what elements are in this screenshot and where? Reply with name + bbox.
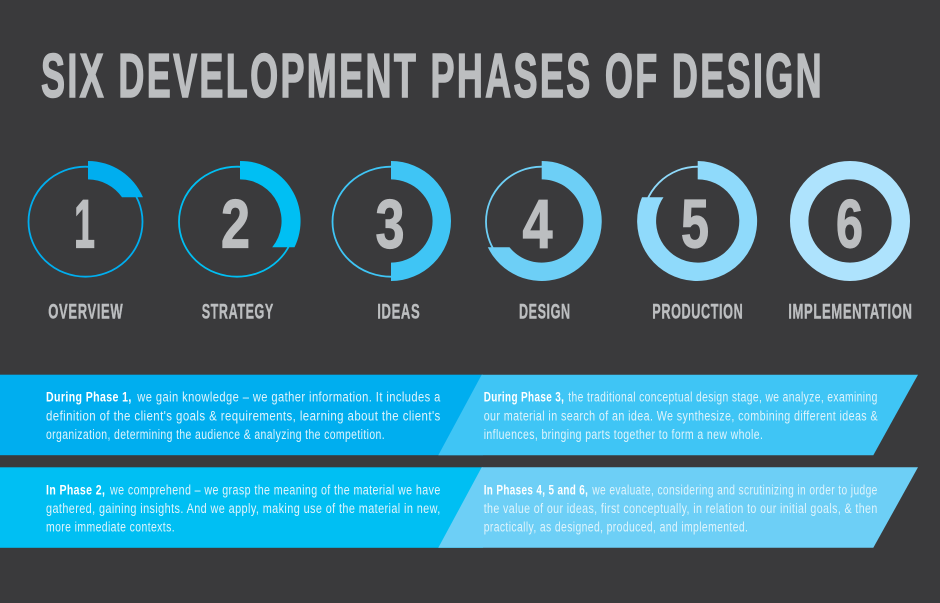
panel: phase 2 [0, 467, 483, 548]
panel: phases 4, 5 and 6: In Phases 4, 5 and 6, [484, 482, 588, 497]
label strategy: STRATEGY [202, 299, 274, 323]
panel: phase 1 [0, 375, 483, 455]
panel: phase 3 [438, 375, 918, 455]
progress ring 6 [799, 170, 901, 272]
panel: phase 2: In Phase 2, [46, 482, 105, 497]
progress ring 2 [179, 161, 301, 277]
panel: phase 1: definition of the client's goals & requirements, learning about the client's [46, 408, 441, 423]
progress ring 5 [637, 161, 757, 281]
phase 4: design [486, 161, 602, 323]
panel: phases 4, 5 and 6: practically, as designed, produced, and implemented. [484, 520, 748, 534]
panel: phase 1: During Phase 1, [46, 390, 132, 405]
panel: phase 2: gathered, gaining insights. And we apply, making use of the material in new, [46, 501, 441, 516]
panel: phase 3: influences, bringing parts together to form a new whole. [484, 427, 763, 442]
number 2: 2 [221, 185, 250, 262]
panel: phase 1: organization, determining the audience & analyzing the competition. [46, 427, 385, 442]
number 4: 4 [522, 185, 552, 262]
phase 3: ideas [332, 161, 451, 323]
number 3: 3 [376, 185, 404, 262]
label ideas: IDEAS [377, 299, 420, 323]
panel: phase 3: During Phase 3, [484, 390, 564, 405]
panel: phase 2: more immediate contexts. [46, 520, 175, 534]
number 5: 5 [681, 185, 709, 262]
phase 5: production [637, 161, 757, 323]
progress ring 3 [332, 161, 451, 281]
number 6: 6 [836, 185, 863, 262]
label overview: OVERVIEW [48, 299, 123, 323]
label production: PRODUCTION [652, 299, 743, 323]
progress ring 1 [28, 161, 143, 277]
number 1: 1 [74, 185, 95, 262]
panel: phases 4, 5 and 6 [438, 467, 918, 548]
panel: phase 1: we gain knowledge – we gather information. It includes a [136, 390, 441, 405]
phase 6: implementation [788, 170, 913, 323]
label design: DESIGN [519, 299, 571, 323]
phase 1: overview [28, 161, 143, 323]
phase 2: strategy [179, 161, 301, 323]
panel: phase 2: we comprehend – we grasp the meaning of the material we have [109, 482, 441, 497]
progress ring 4 [486, 161, 602, 281]
